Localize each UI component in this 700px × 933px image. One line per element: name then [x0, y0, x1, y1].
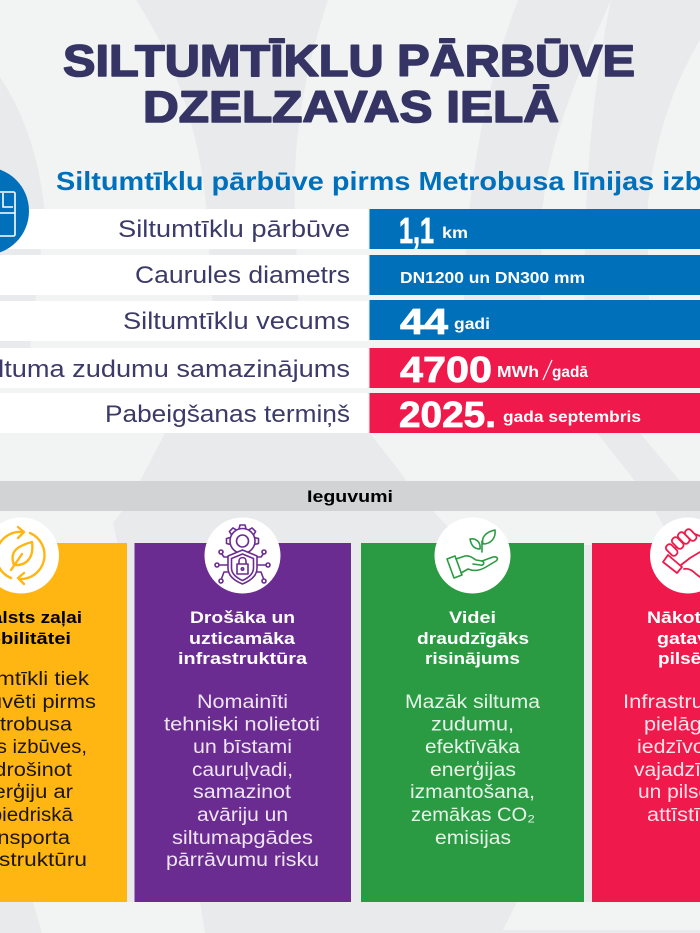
card body [405, 692, 540, 849]
card body: siltumapgādes [172, 828, 313, 849]
subtitle: Siltumtīklu pārbūve pirms Metrobusa līnijas izbūvi [56, 166, 700, 196]
card body: cauruļvadi, [192, 760, 293, 781]
card heading: risinājums [425, 649, 520, 668]
icon: gear shield lock [204, 518, 280, 594]
card heading: Videi [449, 608, 496, 627]
card body: samazinot [193, 782, 292, 803]
row: completion date: Pabeigšanas termiņš [105, 401, 350, 428]
title: DZELZAVAS IELĀ [143, 83, 559, 132]
row: network age: Siltumtīklu vecums [123, 308, 350, 335]
card body: emisijas [435, 828, 511, 849]
row: completion date [0, 393, 700, 435]
card body: izmantošana, [410, 782, 535, 803]
card heading: Drošāka un [190, 608, 295, 627]
row: heat loss reduction: 4700 [400, 349, 492, 390]
panel: safer infrastructure [134, 518, 351, 902]
row: network reconstruction [0, 209, 700, 251]
icon: leaf with cycle arrows [0, 518, 59, 594]
row: network reconstruction: km [442, 225, 468, 242]
card heading [417, 608, 529, 668]
row: network age: 44 [400, 301, 448, 342]
heading band: benefits: Ieguvumi [307, 488, 393, 506]
card heading [0, 608, 82, 648]
card heading: draudzīgāks [417, 629, 529, 648]
row: heat loss reduction: MWh [497, 364, 539, 381]
card heading [647, 608, 700, 668]
row: pipe diameter: Caurules diametrs [135, 262, 350, 289]
row: heat loss reduction: gadā [552, 364, 588, 381]
card heading: uzticamāka [189, 629, 296, 648]
card body: Nomainīti [197, 692, 288, 713]
card body: un bīstami [193, 737, 292, 758]
row: network reconstruction: 1,1 [399, 210, 434, 251]
row: completion date: gada septembris [503, 409, 641, 426]
card body: zemākas CO₂ [411, 805, 535, 826]
card body [164, 692, 320, 871]
card body: avāriju un [197, 805, 288, 826]
title [63, 37, 635, 132]
panel: green mobility [0, 518, 127, 902]
card body: tehniski nolietoti [164, 715, 320, 736]
card body: zudumu, [431, 715, 514, 736]
row: heat loss reduction [0, 348, 700, 390]
card body: pārrāvumu risku [166, 850, 319, 871]
card body: enerģijas [430, 760, 516, 781]
title: SILTUMTĪKLU PĀRBŪVE [63, 37, 635, 86]
card body: Mazāk siltuma [405, 692, 540, 713]
row: network reconstruction: Siltumtīklu pārbūve [118, 216, 350, 243]
panel: future-ready city [592, 518, 700, 902]
card body [623, 692, 700, 826]
card heading [178, 608, 308, 668]
row: pipe diameter [0, 255, 700, 295]
card heading: infrastruktūra [178, 649, 308, 668]
heading band: benefits [0, 481, 700, 511]
row: pipe diameter: DN1200 un DN300 mm [400, 270, 585, 287]
panel: eco-friendly solution [361, 518, 584, 902]
row: network age: gadi [454, 316, 490, 333]
icon: hand with plant [434, 518, 510, 594]
row: completion date: 2025. [399, 394, 496, 435]
icon: clasped hands [650, 518, 700, 594]
card body [0, 669, 96, 871]
icon: blue circle with plan [0, 167, 29, 255]
panel: project facts table [0, 209, 700, 435]
card body: efektīvāka [425, 737, 520, 758]
row: network age [0, 300, 700, 342]
